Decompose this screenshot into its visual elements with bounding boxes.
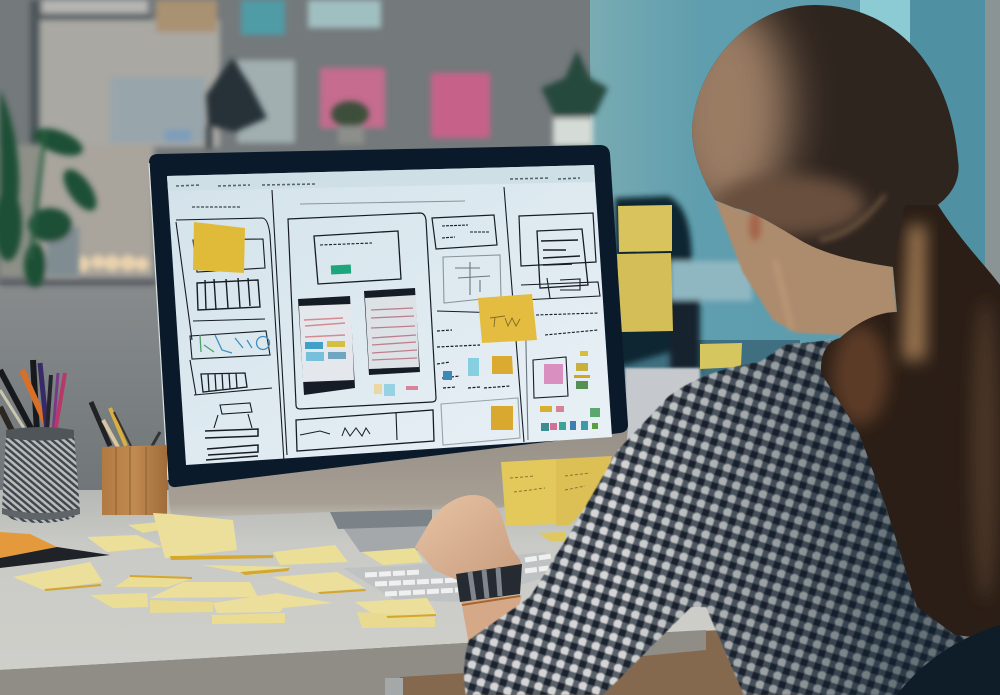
person: checkered shirt xyxy=(464,340,965,695)
keyboard xyxy=(343,552,560,602)
sticky note on screen centre xyxy=(478,294,537,343)
sticky note on screen top left xyxy=(193,222,245,273)
wooden pencil holder xyxy=(91,402,167,515)
pencil cup with pencils xyxy=(0,360,80,523)
left column sketches xyxy=(176,187,524,462)
lists mid right xyxy=(437,330,510,388)
sticky notes hanging below monitor xyxy=(501,456,612,542)
colourful sketches xyxy=(200,335,270,353)
sketch panels right of central xyxy=(432,215,497,249)
green progress button xyxy=(331,264,351,275)
tablet wireframe right xyxy=(364,288,420,375)
sticky notes on monitor edge xyxy=(617,205,742,369)
small colour chips xyxy=(374,351,600,431)
small plant in front of pink note xyxy=(331,101,369,144)
tablet wireframe left xyxy=(298,296,355,395)
person: hair xyxy=(692,5,959,267)
wristwatch xyxy=(456,564,522,602)
foreground chair corner xyxy=(897,625,1000,695)
monitor bezel xyxy=(149,145,628,487)
mesh cup xyxy=(2,434,80,523)
screen toolbar xyxy=(167,165,595,191)
desk lamp xyxy=(206,58,267,149)
plant on wall shelf xyxy=(0,90,103,287)
person: ponytail xyxy=(810,200,1000,650)
floor beneath desk xyxy=(380,620,800,695)
desk xyxy=(0,490,760,695)
monitor chin xyxy=(168,420,628,518)
monitor screen xyxy=(167,165,612,465)
wall pin board and notes xyxy=(0,0,490,286)
background chair and shelf xyxy=(615,196,752,370)
central wireframe panel xyxy=(288,213,436,409)
wireframe sketches on screen xyxy=(176,187,600,462)
right column sketches xyxy=(519,213,596,266)
person: neck and face edge xyxy=(715,200,897,335)
progress search bar xyxy=(300,201,465,204)
orange notebook on desk xyxy=(0,532,110,568)
handwriting on sticky note xyxy=(490,316,520,327)
pencils xyxy=(0,360,65,433)
warm lights on shelf xyxy=(74,255,149,272)
person: hand on keyboard and forearm xyxy=(415,495,522,645)
document on desk behind monitor xyxy=(625,368,700,448)
top card in central panel xyxy=(314,231,401,284)
monitor xyxy=(149,145,628,518)
potted plant on wall right xyxy=(541,50,608,146)
sticky notes scattered on desk xyxy=(13,513,437,628)
bottom long sketch xyxy=(296,410,434,451)
monitor stand xyxy=(330,508,432,552)
